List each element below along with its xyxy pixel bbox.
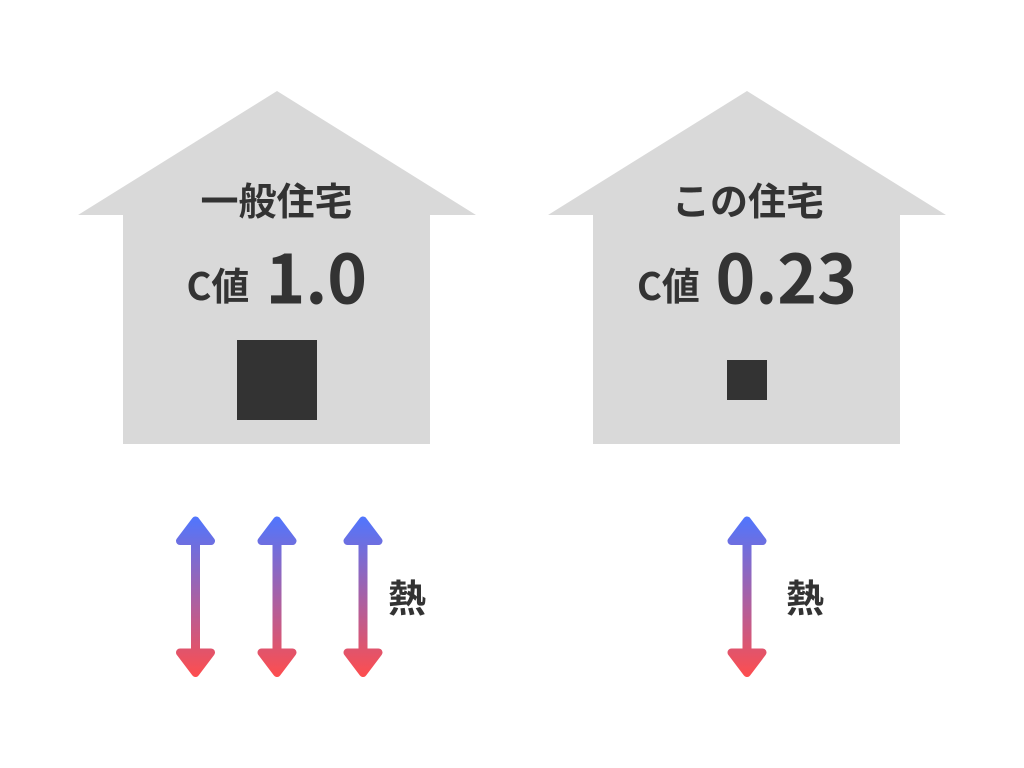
label: C value: C値 <box>637 256 700 311</box>
house shape: this house <box>548 91 946 444</box>
arrow: heat 1 <box>180 520 211 673</box>
label: heat, general house: 熱 <box>388 568 426 623</box>
arrow: heat 3 <box>348 520 378 673</box>
gap square: small <box>727 360 767 400</box>
arrow: heat 2 <box>262 520 292 673</box>
label: C value: C値 <box>186 256 249 311</box>
label: heat, this house: 熱 <box>786 568 824 623</box>
gap square: large <box>237 340 317 420</box>
house shape: general house <box>78 91 476 444</box>
value: C value 1.0: 1.0 <box>266 226 367 324</box>
value: C value 0.23: 0.23 <box>716 226 857 324</box>
panel: this house <box>548 91 946 444</box>
panel: general house <box>78 91 476 444</box>
heading: general house: 一般住宅 <box>200 171 353 226</box>
heading: this house: この住宅 <box>672 171 824 226</box>
arrow: heat 4 <box>732 520 762 673</box>
